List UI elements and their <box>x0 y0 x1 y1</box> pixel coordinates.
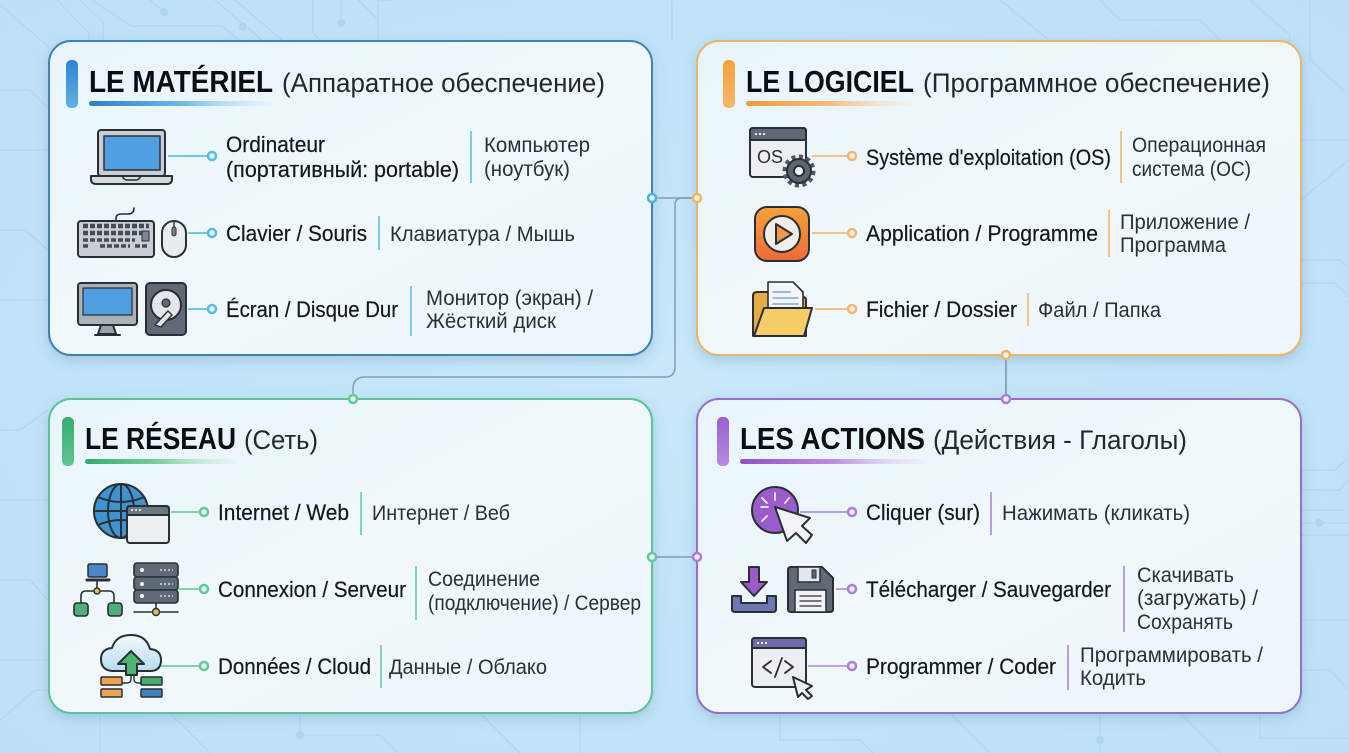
term: ordinateur: Компьютер <box>484 133 590 157</box>
icon: application <box>755 207 809 261</box>
term: connexion: Соединение <box>428 567 540 591</box>
term: ordinateur <box>226 131 590 183</box>
heading: le logiciel: LE LOGICIEL <box>746 64 914 99</box>
term: cliquer: Cliquer (sur) <box>866 500 980 525</box>
connector: laptop <box>168 152 216 160</box>
term: écran: Монитор (экран) / <box>426 286 593 310</box>
term: données: Données / Cloud <box>218 654 371 679</box>
term: télécharger: Скачивать <box>1137 563 1234 587</box>
term: clavier: Clavier / Souris <box>226 221 367 246</box>
term: système: Операционная <box>1132 133 1266 157</box>
term: système: Système d'exploitation (OS) <box>866 145 1111 170</box>
term: système: система (ОС) <box>1132 157 1251 181</box>
term: écran <box>226 286 593 336</box>
term: données <box>218 645 547 688</box>
term: données: Данные / Облако <box>389 655 547 679</box>
term: clavier <box>226 216 575 250</box>
connector: keyboard <box>188 229 216 237</box>
connector: télécharger <box>836 585 856 593</box>
term: fichier: Fichier / Dossier <box>866 297 1017 322</box>
connector: réseau to actions <box>652 556 697 558</box>
icon: cloud data <box>101 635 162 697</box>
term: programmer <box>866 643 1263 690</box>
icon: laptop <box>91 130 172 184</box>
connector: application <box>812 229 856 237</box>
connector: internet <box>171 508 208 516</box>
connector: screen <box>188 305 216 313</box>
connector: cliquer <box>800 508 856 516</box>
term: cliquer <box>866 492 1190 535</box>
term: ordinateur: (ноутбук) <box>484 157 570 181</box>
term: application: Application / Programme <box>866 221 1098 246</box>
connector: serveur <box>178 585 208 593</box>
heading: les actions: (Действия - Глаголы) <box>933 425 1187 455</box>
connector: matériel to logiciel to réseau <box>353 198 697 399</box>
icon: click <box>752 487 812 543</box>
panel: le réseau <box>49 399 652 713</box>
connector: données <box>161 662 208 670</box>
term: ordinateur: Ordinateur <box>226 132 325 157</box>
connector: fichier <box>815 305 856 313</box>
term: fichier: Файл / Папка <box>1038 298 1161 322</box>
connector: logiciel to actions <box>1005 355 1007 399</box>
icon: code window <box>752 638 812 699</box>
panel: les actions <box>697 399 1301 713</box>
icon: file and folder <box>753 282 812 336</box>
icon: operating system <box>750 128 813 185</box>
heading: le matériel <box>66 60 605 108</box>
heading: les actions: LES ACTIONS <box>740 421 925 456</box>
term: ordinateur: (портативный: portable) <box>226 157 459 182</box>
heading: le réseau <box>62 417 318 466</box>
term: programmer: Кодить <box>1080 666 1146 690</box>
heading: le matériel: (Аппаратное обеспечение) <box>282 68 605 98</box>
term: application: Приложение / <box>1120 210 1250 234</box>
heading: le réseau: (Сеть) <box>244 425 318 455</box>
term: application <box>866 210 1250 257</box>
icon: operating system: OS <box>757 147 783 167</box>
term: connexion <box>218 566 641 620</box>
term: système <box>866 131 1266 183</box>
term: programmer: Программировать / <box>1080 643 1263 667</box>
term: internet: Internet / Web <box>218 500 349 525</box>
term: télécharger: (загружать) / <box>1137 586 1258 610</box>
heading: les actions <box>717 417 1187 466</box>
term: cliquer: Нажимать (кликать) <box>1002 501 1190 525</box>
term: internet <box>218 492 510 535</box>
heading: le réseau: LE RÉSEAU <box>85 421 236 456</box>
icon: network and server <box>74 563 178 616</box>
term: connexion: (подключение) / Сервер <box>428 591 641 615</box>
term: clavier: Клавиатура / Мышь <box>390 222 575 246</box>
connector: programmer <box>808 662 856 670</box>
term: écran: Écran / Disque Dur <box>226 297 398 322</box>
junction dots <box>349 194 1010 561</box>
term: écran: Жёсткий диск <box>426 309 557 333</box>
icon: monitor and hard disk <box>78 283 186 335</box>
heading: le matériel: LE MATÉRIEL <box>89 64 273 99</box>
panel: le matériel <box>49 41 652 355</box>
term: télécharger <box>866 563 1258 634</box>
connector: os <box>812 152 856 160</box>
heading: le logiciel: (Программное обеспечение) <box>923 68 1270 98</box>
term: fichier <box>866 293 1161 326</box>
heading: le logiciel <box>723 60 1270 108</box>
term: application: Программа <box>1120 233 1226 257</box>
term: internet: Интернет / Веб <box>372 501 510 525</box>
term: connexion: Connexion / Serveur <box>218 577 406 602</box>
icon: internet <box>94 484 169 543</box>
term: télécharger: Сохранять <box>1137 610 1233 634</box>
term: télécharger: Télécharger / Sauvegarder <box>866 577 1111 602</box>
term: programmer: Programmer / Coder <box>866 654 1056 679</box>
panel: le logiciel <box>697 41 1301 355</box>
icon: keyboard and mouse <box>78 208 186 257</box>
icon: download and save <box>732 567 833 612</box>
